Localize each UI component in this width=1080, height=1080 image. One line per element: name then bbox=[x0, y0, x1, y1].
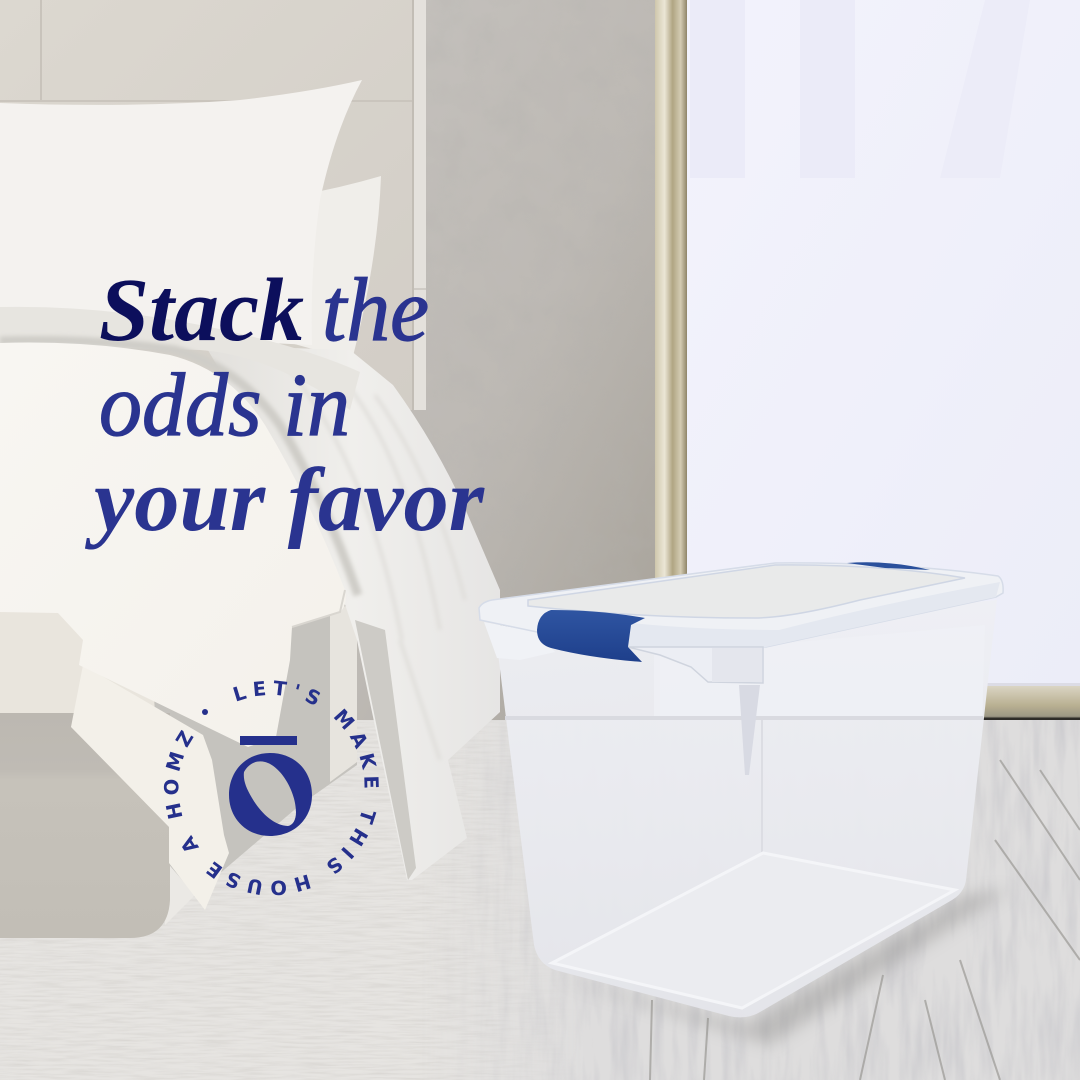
pillow back bbox=[280, 176, 381, 360]
gold mirror frame bbox=[655, 0, 1080, 722]
lid front rim bbox=[628, 582, 1000, 647]
tab post bbox=[712, 648, 762, 682]
logo macron bbox=[240, 736, 297, 745]
bin inner corner bbox=[761, 720, 763, 853]
pillow front bbox=[0, 80, 362, 345]
headline line 2: odds in bbox=[99, 356, 350, 455]
lid inner panel bbox=[528, 565, 965, 618]
bin shadow bbox=[550, 890, 1010, 1045]
bed base bbox=[0, 600, 357, 938]
lid top bbox=[479, 563, 1003, 647]
headline bbox=[84, 261, 485, 550]
circular slogan: LET'S MAKE THIS HOUSE A HOMZ bbox=[164, 680, 379, 896]
blanket top band bbox=[0, 307, 360, 410]
white sheet bbox=[0, 342, 346, 747]
lower sheet flap bbox=[71, 665, 229, 910]
wood floor bbox=[0, 720, 1080, 1080]
headline line 1 bbox=[99, 261, 429, 360]
blue latch front bbox=[537, 610, 645, 662]
plastic storage bin bbox=[479, 562, 1010, 1045]
headline line 1: the bbox=[322, 261, 429, 360]
headline line 3: your favor bbox=[84, 451, 485, 550]
bin body bbox=[497, 600, 997, 1017]
logo letter o bbox=[229, 753, 312, 836]
sheet edge shadow bbox=[0, 340, 358, 595]
headline line 1: Stack bbox=[99, 261, 304, 360]
concrete wall bbox=[300, 0, 660, 730]
front tab bbox=[628, 647, 763, 683]
left corner tab bbox=[484, 622, 555, 660]
side blanket drape bbox=[205, 345, 500, 880]
badge dot bbox=[202, 709, 208, 715]
mirror bbox=[680, 0, 1080, 690]
corner post bbox=[739, 685, 760, 775]
headboard bbox=[0, 0, 426, 410]
bin inner panel bbox=[654, 625, 985, 720]
badge bbox=[164, 680, 379, 896]
blue latch back bbox=[847, 562, 930, 570]
bin band line bbox=[505, 716, 983, 720]
bin inner floor bbox=[552, 853, 955, 1008]
drape fold shadow bbox=[355, 620, 416, 880]
